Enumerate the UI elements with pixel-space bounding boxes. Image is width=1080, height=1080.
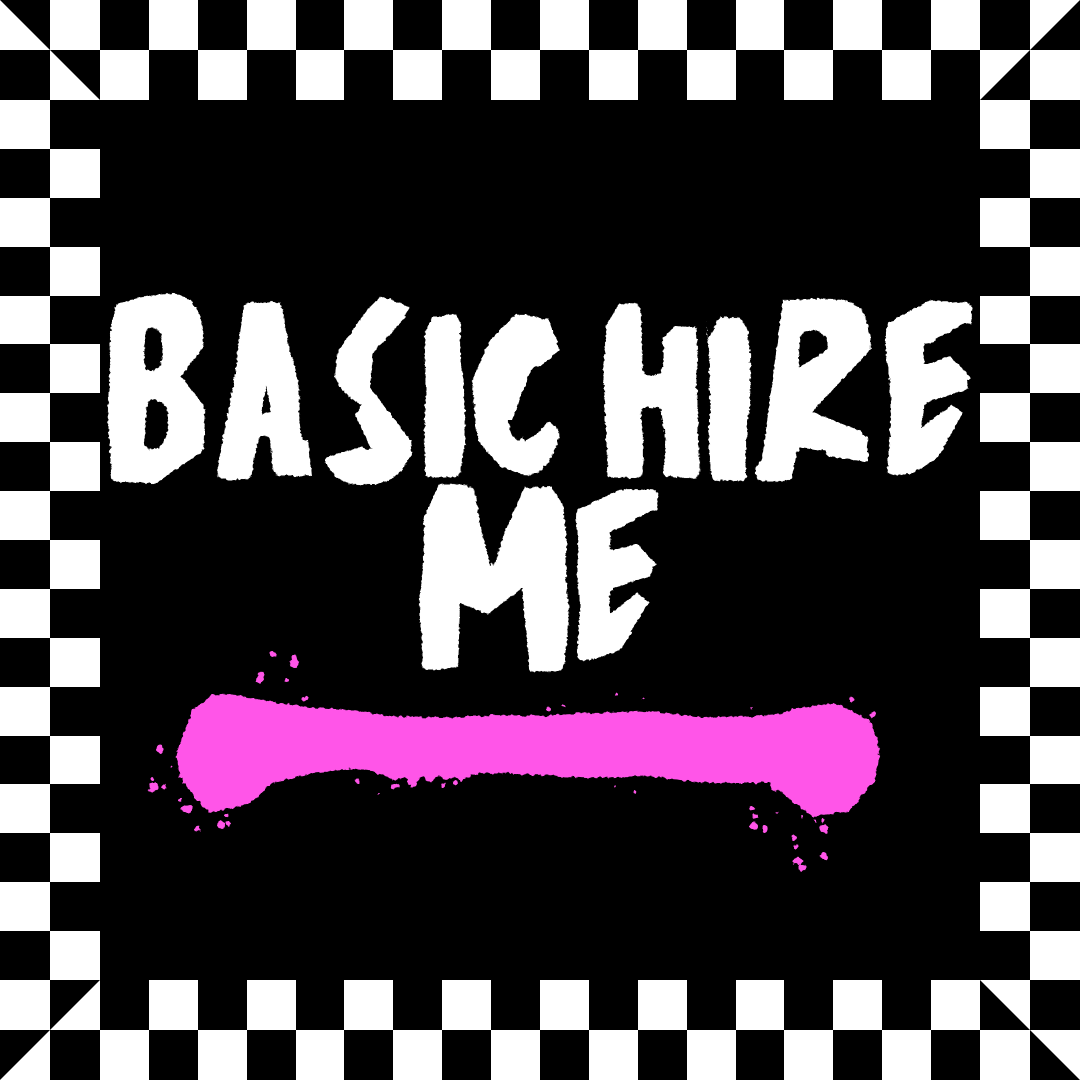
title: BASIC HIRE ME: S: [326, 242, 409, 534]
pink spray paint underline: [148, 652, 880, 872]
title: BASIC HIRE ME: H: [606, 252, 698, 530]
spray stroke: [176, 694, 880, 816]
title: BASIC HIRE ME: I: [424, 268, 464, 530]
brush edge trims: [102, 285, 979, 674]
title: BASIC HIRE ME: B: [109, 237, 203, 539]
title: BASIC HIRE ME: C: [477, 269, 553, 520]
title: BASIC HIRE ME: M: [419, 433, 568, 723]
title: BASIC HIRE ME: R: [756, 246, 872, 532]
title: BASIC HIRE ME: A: [224, 249, 303, 531]
title: BASIC HIRE ME: [102, 237, 979, 723]
title: BASIC HIRE ME: I: [709, 268, 749, 530]
paint splatter: [148, 652, 876, 872]
title: BASIC HIRE ME: E: [889, 249, 968, 524]
title: BASIC HIRE ME: E: [578, 440, 654, 712]
brush fills: [285, 302, 971, 656]
